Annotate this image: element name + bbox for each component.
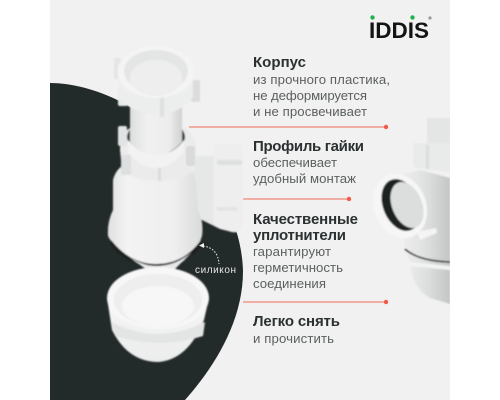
product: siphon front view xyxy=(107,46,243,362)
text block: качественные уплотнители: уплотнители xyxy=(253,227,346,244)
upper pipe and nut xyxy=(425,118,450,170)
text block: качественные уплотнители xyxy=(253,211,358,291)
text block: качественные уплотнители: герметичность xyxy=(253,260,343,275)
text block: профиль гайки: Профиль гайки xyxy=(253,138,364,155)
text block: легко снять: Легко снять xyxy=(253,313,340,330)
top nut xyxy=(114,46,200,117)
outlet ring xyxy=(380,176,438,240)
text block: легко снять xyxy=(253,313,340,346)
text block: корпус: и не просвечивает xyxy=(253,104,367,119)
seal ring xyxy=(405,249,450,262)
text block: корпус: из прочного пластика, xyxy=(253,72,390,87)
product: siphon side view xyxy=(380,118,450,304)
background panel xyxy=(50,0,450,400)
main body xyxy=(108,156,202,272)
cup xyxy=(107,267,209,362)
text block: корпус xyxy=(253,54,390,119)
text block: профиль гайки: обеспечивает xyxy=(253,155,337,170)
lower cup xyxy=(410,262,450,270)
side outlet xyxy=(186,144,243,232)
pipe xyxy=(130,100,182,155)
lower nut xyxy=(118,120,196,181)
label: силикон: силикон xyxy=(195,265,236,276)
text block: профиль гайки xyxy=(253,138,364,186)
text block: корпус: не деформируется xyxy=(253,88,367,103)
text block: качественные уплотнители: гарантируют xyxy=(253,244,331,259)
logo: IDDIS: IDDIS xyxy=(369,18,429,43)
text block: качественные уплотнители: Качественные xyxy=(253,211,358,228)
dark curved background shape xyxy=(50,83,243,400)
callout line: корпус xyxy=(189,125,388,129)
callout line: уплотнители xyxy=(243,300,388,304)
text block: корпус: Корпус xyxy=(253,54,306,71)
callout line: профиль гайки xyxy=(243,197,351,201)
text block: легко снять: и прочистить xyxy=(253,331,334,346)
icon: dotted arrow to silicone seal xyxy=(199,243,219,264)
text block: профиль гайки: удобный монтаж xyxy=(253,171,356,186)
housing xyxy=(404,170,450,304)
text block: качественные уплотнители: соединения xyxy=(253,276,326,291)
